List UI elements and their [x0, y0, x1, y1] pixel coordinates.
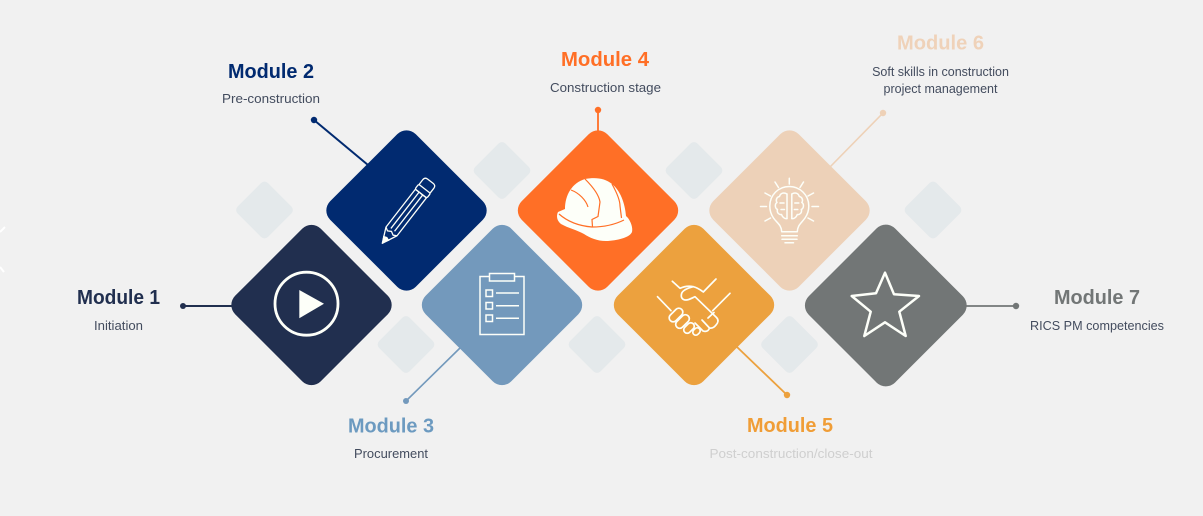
module 2 diamond: [321, 125, 492, 296]
module 6 connector: [830, 110, 886, 167]
icon: hard hat: [557, 178, 632, 241]
module 4: construction stage: [512, 49, 684, 296]
module 6 description: Soft skills in construction: [872, 65, 1009, 79]
icon: clipboard checklist: [480, 274, 524, 334]
module 4 heading: Module 4: [561, 49, 650, 71]
module 6: soft skills: [704, 32, 1009, 296]
icon: pencil: [376, 177, 436, 248]
module 2 description: Pre-construction: [222, 92, 320, 106]
module 5 diamond: [608, 219, 780, 391]
module 3 description: Procurement: [354, 447, 429, 461]
module 6 diamond: [704, 125, 875, 296]
icon: handshake: [658, 279, 730, 336]
module 2 connector: [311, 117, 368, 165]
module 3 diamond: [416, 219, 588, 391]
module 6 description: project management: [884, 82, 998, 96]
module 6 heading: Module 6: [897, 32, 984, 54]
module 1: initiation: [77, 219, 397, 391]
module 2 heading: Module 2: [228, 61, 314, 83]
module 5: post-construction: [608, 219, 873, 461]
module 7 connector: [965, 303, 1019, 309]
module 1 connector: [180, 303, 234, 309]
module 5 description: Post-construction/close-out: [710, 447, 873, 461]
module 1 heading: Module 1: [77, 287, 160, 309]
module 4 description: Construction stage: [550, 81, 661, 95]
module 7 description: RICS PM competencies: [1030, 319, 1164, 333]
module 4 diamond: [512, 125, 684, 296]
module 4 connector: [595, 107, 601, 132]
module 5 heading: Module 5: [747, 415, 833, 437]
module 2: pre-construction: [222, 61, 492, 296]
module 1 description: Initiation: [94, 319, 143, 333]
icon: lightbulb with brain: [760, 178, 818, 243]
module 1 diamond: [226, 219, 397, 391]
module 3 heading: Module 3: [348, 416, 434, 438]
icon: play button: [275, 272, 338, 335]
module 7 diamond: [800, 219, 972, 392]
module 5 connector: [737, 347, 790, 398]
module 7 heading: Module 7: [1054, 287, 1140, 309]
module 3: procurement: [348, 219, 588, 461]
module 3 connector: [403, 348, 460, 404]
module 7: RICS competencies: [800, 219, 1164, 392]
icon: star: [852, 273, 919, 336]
